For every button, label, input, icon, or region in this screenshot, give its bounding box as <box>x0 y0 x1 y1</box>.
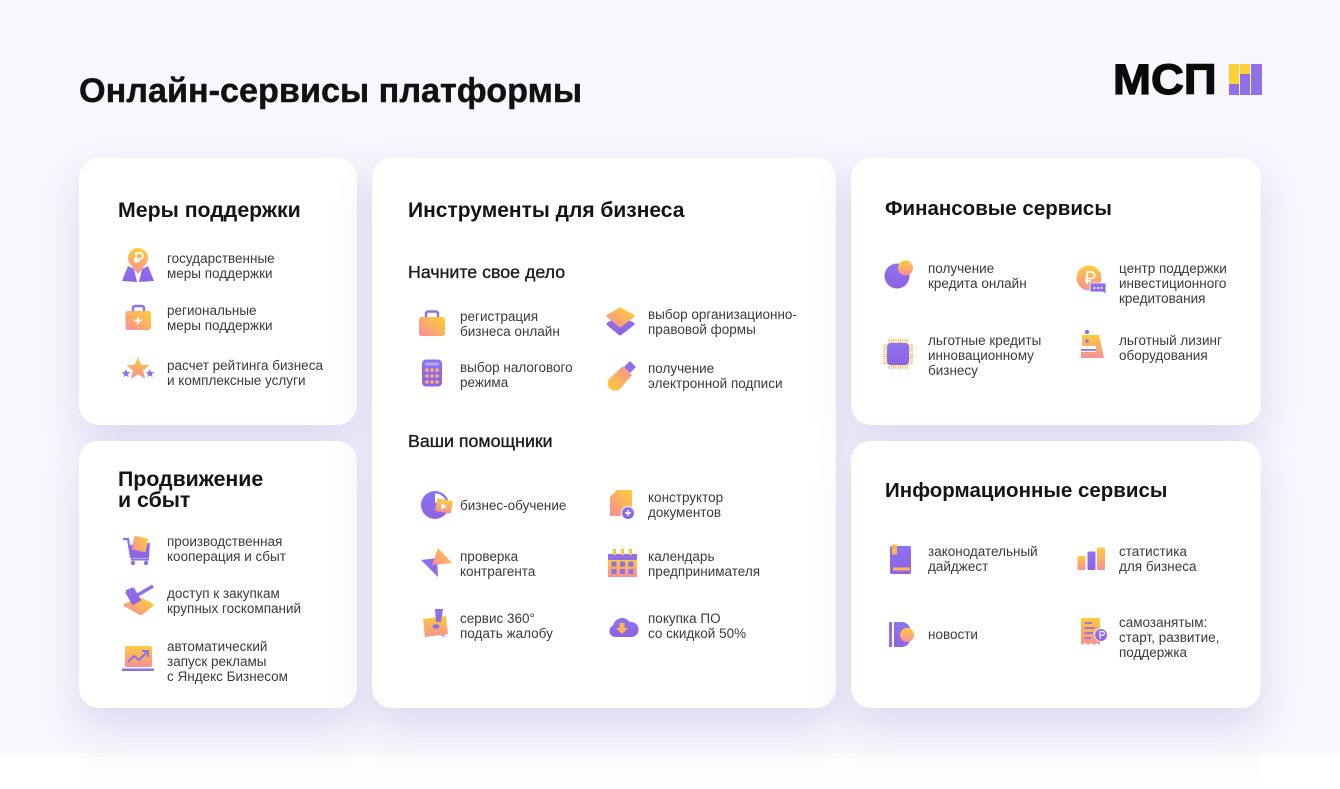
panel: Меры поддержки <box>79 158 357 425</box>
item: статистика для бизнеса: для бизнеса <box>1119 559 1196 574</box>
logo <box>1113 56 1262 104</box>
item: покупка ПО: покупка ПО <box>648 611 721 626</box>
item: расчет рейтинга <box>122 357 323 388</box>
heading: Продвижение <box>118 467 263 491</box>
heading: и сбыт <box>118 488 190 512</box>
panel: Финансовые сервисы <box>851 158 1261 425</box>
item: сервис 360 <box>423 609 553 641</box>
item: автоматический запуск рекламы <box>122 639 288 684</box>
logo: МСП <box>1113 56 1217 104</box>
item: льготные кредиты инновационному бизнесу: льготные кредиты <box>928 333 1041 348</box>
item: новости: новости <box>928 627 978 642</box>
item: выбор налогового режима: выбор налогового <box>460 360 573 375</box>
item: автоматический запуск рекламы: автоматический <box>167 639 267 654</box>
item: получение электронной подписи: получение <box>648 361 714 376</box>
title: Онлайн-сервисы платформы <box>79 72 582 110</box>
item: проверка контрагента: контрагента <box>460 564 535 579</box>
item: льготный лизинг оборудования <box>1081 330 1222 363</box>
item: статистика для бизнеса <box>1078 544 1196 574</box>
item: центр поддержки инвестиционного кредитования: кредитования <box>1119 291 1205 306</box>
item: законодательный дайджест: законодательный <box>928 544 1038 559</box>
item: выбор организационно-правовой формы: правовой формы <box>648 322 756 337</box>
item: государственные меры поддержки <box>122 248 275 282</box>
item: льготные кредиты инновационному бизнесу: инновационному <box>928 348 1034 363</box>
item: центр поддержки инвестиционного кредитования: центр поддержки <box>1119 261 1227 276</box>
item: получение электронной подписи <box>608 361 782 391</box>
item: выбор организационно-правовой формы <box>606 307 797 337</box>
item: регистрация бизнеса онлайн: бизнеса онлайн <box>460 324 560 339</box>
item: льготные кредиты инновационному бизнесу: бизнесу <box>928 363 978 378</box>
item: законодательный дайджест: дайджест <box>928 559 988 574</box>
item: регистрация бизнеса онлайн: регистрация <box>460 309 538 324</box>
item: самозанятым: старт, развитие, <box>1119 630 1219 645</box>
item: статистика для бизнеса: статистика <box>1119 544 1187 559</box>
item: конструктор документов <box>610 490 723 520</box>
item: самозанятым: самозанятым: <box>1119 615 1207 630</box>
item: расчет рейтинга: расчет рейтинга бизнеса <box>167 358 323 373</box>
item: выбор организационно-правовой формы: выбор организационно- <box>648 307 797 322</box>
panel: Информационные сервисы <box>851 441 1261 708</box>
item: центр поддержки инвестиционного кредитования: инвестиционного <box>1119 276 1226 291</box>
item: сервис 360: сервис 360° <box>460 611 535 626</box>
item: региональные меры поддержки <box>126 303 273 333</box>
item: проверка контрагента: проверка <box>460 549 518 564</box>
item: выбор налогового режима <box>422 360 573 390</box>
item: календарь предпринимателя: предпринимателя <box>648 564 760 579</box>
item: региональные меры поддержки: региональные <box>167 303 257 318</box>
heading: Финансовые сервисы <box>885 197 1112 220</box>
item: доступ к закупкам: доступ к закупкам <box>167 586 280 601</box>
subheading: Начните свое дело: Начните свое дело <box>408 262 565 282</box>
item: бизнес-обучение: бизнес-обучение <box>460 498 566 513</box>
item: центр поддержки инвестиционного кредитования <box>1076 261 1227 306</box>
panel: Продвижение и сбыт <box>79 441 357 708</box>
item: самозанятым <box>1081 615 1219 660</box>
item: производственная кооперация: производственная <box>167 534 282 549</box>
item: самозанятым: поддержка <box>1119 645 1187 660</box>
item: расчет рейтинга: и комплексные услуги <box>167 373 306 388</box>
item: регистрация бизнеса онлайн <box>419 309 560 339</box>
item: автоматический запуск рекламы: запуск рекламы <box>167 654 266 669</box>
item: льготный лизинг оборудования: льготный лизинг <box>1119 333 1222 348</box>
item: календарь предпринимателя <box>608 549 760 579</box>
item: календарь предпринимателя: календарь <box>648 549 714 564</box>
item: получение электронной подписи: электронной подписи <box>648 376 782 391</box>
heading: Меры поддержки <box>118 198 301 222</box>
item: льготный лизинг оборудования: оборудования <box>1119 348 1208 363</box>
item: законодательный дайджест <box>890 544 1038 574</box>
item: производственная кооперация <box>123 534 286 566</box>
panel: Инструменты для бизнеса <box>372 158 836 708</box>
item: конструктор документов: документов <box>648 505 721 520</box>
item: производственная кооперация: кооперация и сбыт <box>167 549 286 564</box>
item: региональные меры поддержки: меры поддержки <box>167 318 273 333</box>
heading: Инструменты для бизнеса <box>408 199 684 222</box>
item: конструктор документов: конструктор <box>648 490 723 505</box>
item: покупка ПО <box>609 611 746 641</box>
item: получение кредита онлайн: кредита онлайн <box>928 276 1027 291</box>
item: сервис 360: подать жалобу <box>460 626 553 641</box>
item: покупка ПО: со скидкой 50% <box>648 626 746 641</box>
item: проверка контрагента <box>421 548 536 579</box>
item: доступ к закупкам <box>124 584 301 616</box>
item: получение кредита онлайн: получение <box>928 261 994 276</box>
item: бизнес-обучение <box>421 491 566 519</box>
heading <box>118 467 263 512</box>
item: получение кредита онлайн <box>884 260 1027 291</box>
item: государственные меры поддержки: государственные <box>167 251 275 266</box>
subheading: Ваши помощники: Ваши помощники <box>408 431 553 451</box>
item: автоматический запуск рекламы: с Яндекс Бизнесом <box>167 669 288 684</box>
heading: Информационные сервисы <box>885 479 1167 502</box>
item: льготные кредиты инновационному бизнесу <box>883 333 1041 378</box>
item: выбор налогового режима: режима <box>460 375 508 390</box>
item: доступ к закупкам: крупных госкомпаний <box>167 601 301 616</box>
item: государственные меры поддержки: меры поддержки <box>167 266 273 281</box>
item: новости <box>889 622 978 647</box>
